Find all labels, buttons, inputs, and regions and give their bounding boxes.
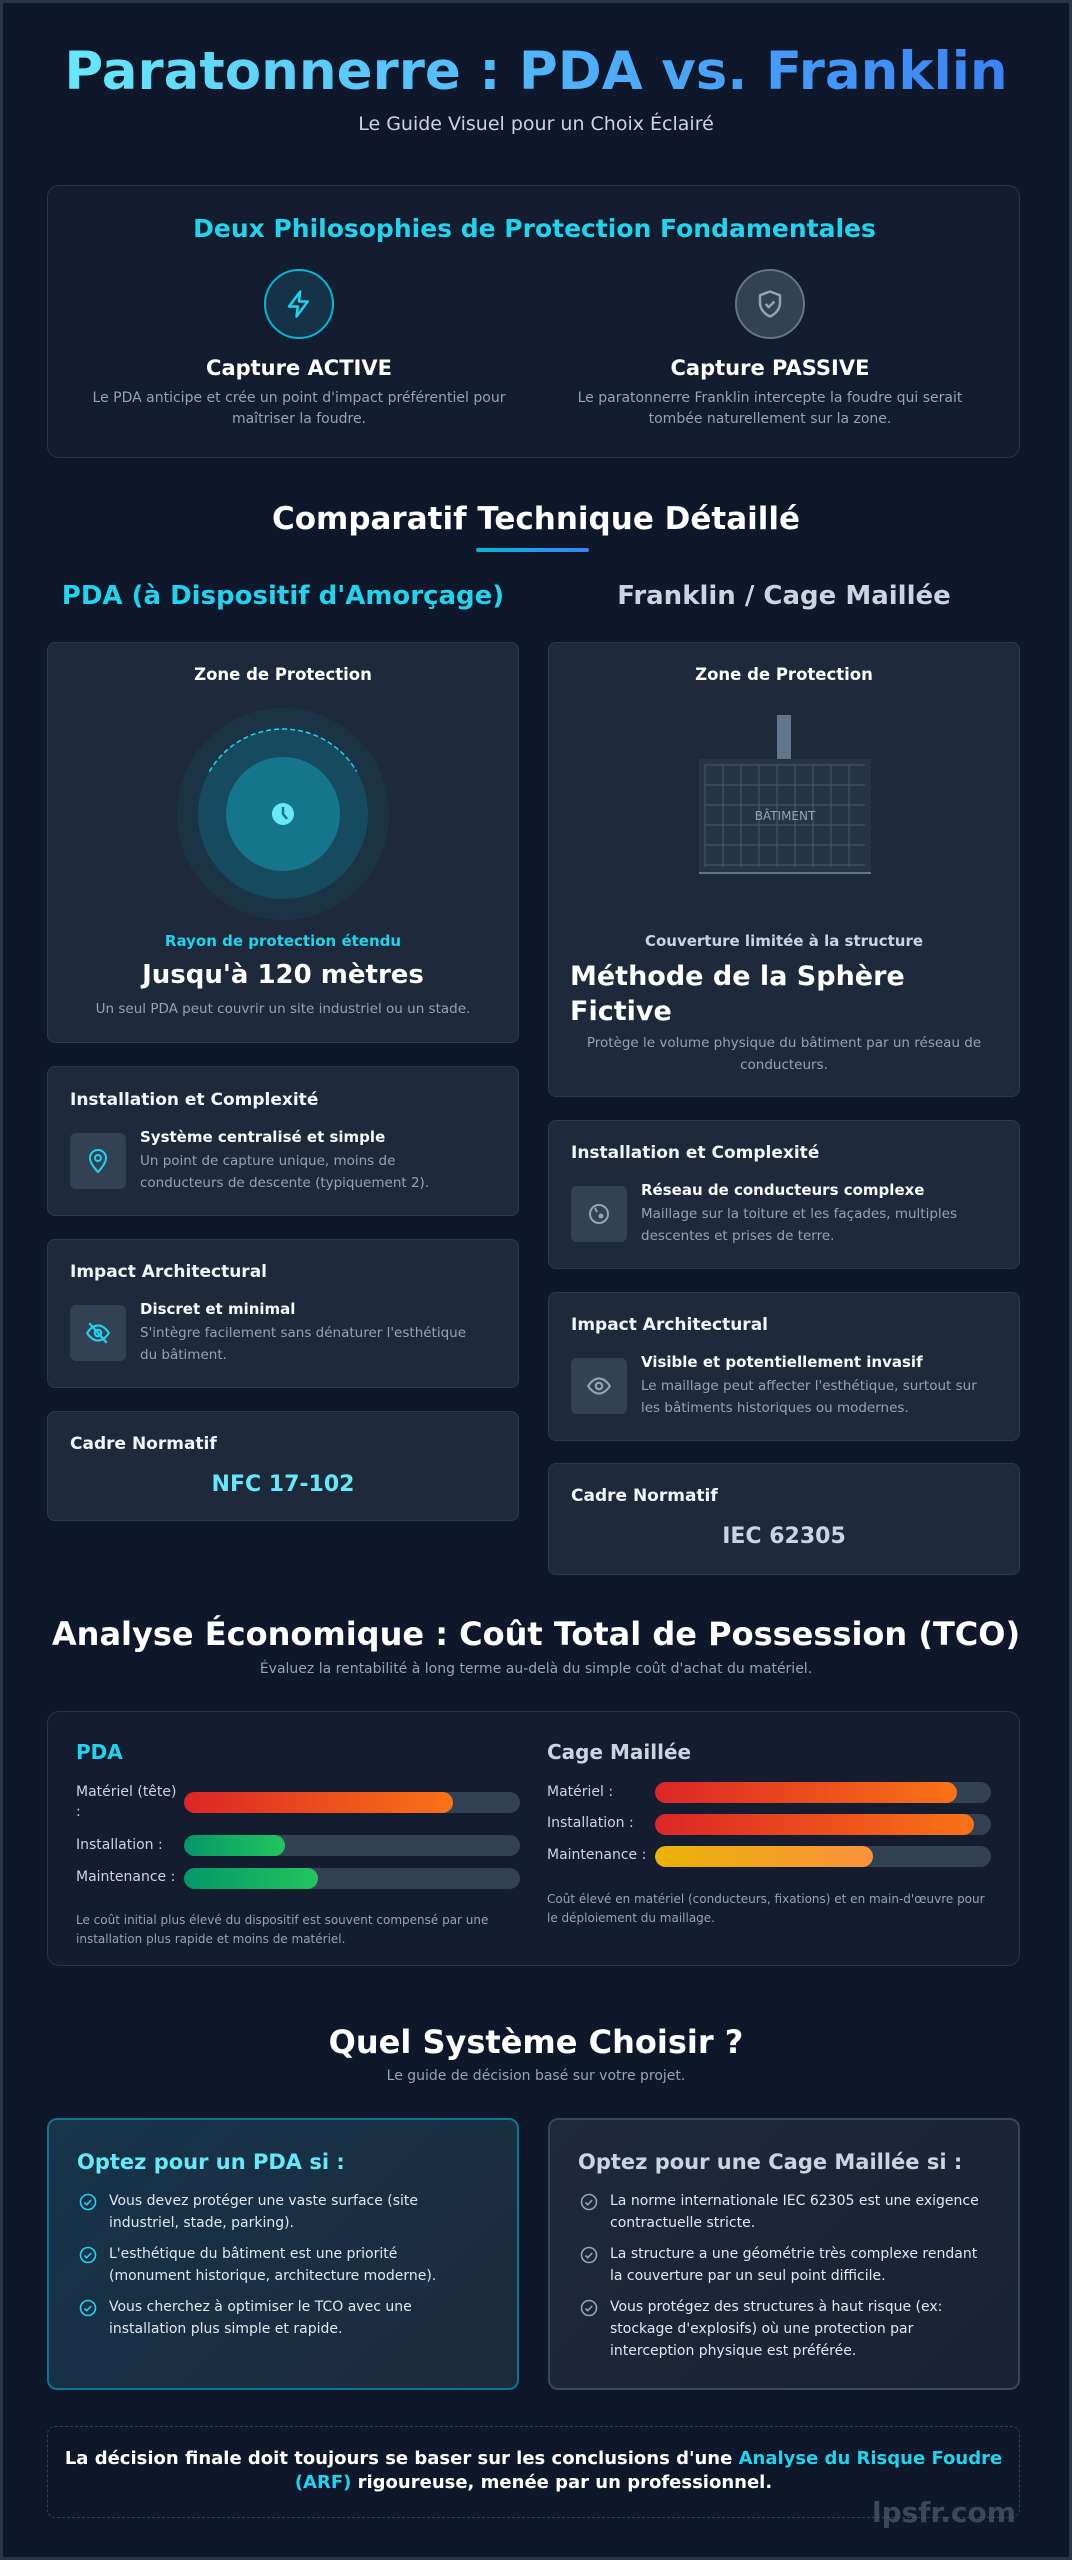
chart: PDA costs: : [76, 1804, 81, 1820]
panel: opt for cage: La structure a une géométrie très complexe rendant [610, 2246, 977, 2262]
panel: PDA zone: Rayon de protection étendu [165, 932, 401, 950]
panel: Franklin impact: Impact Architectural [571, 1315, 768, 1335]
panel: opt for PDA: Optez pour un PDA si : [77, 2150, 345, 2174]
panel: Franklin impact: les bâtiments historiques ou modernes. [641, 1400, 909, 1416]
text: capture active: maîtriser la foudre. [232, 411, 366, 427]
chart: cage costs: Installation : [547, 1815, 634, 1831]
chart: PDA costs [76, 1740, 520, 1946]
list: cage reasons [580, 2193, 979, 2359]
list: PDA reasons [80, 2193, 436, 2337]
panel: Franklin installation: Maillage sur la toiture et les façades, multiples [641, 1206, 957, 1222]
panel: opt for cage: Optez pour une Cage Maillée si : [578, 2150, 962, 2174]
chart: PDA costs: PDA [76, 1740, 123, 1764]
panel: Franklin zone: Protège le volume physique du bâtiment par un réseau de conducteurs. [587, 1035, 981, 1073]
icon: network [571, 1186, 627, 1242]
panel: opt for cage: la couverture par un seul point difficile. [610, 2268, 886, 2284]
panel: PDA zone: Jusqu'à 120 mètres [142, 960, 424, 990]
icon: eye off [70, 1305, 126, 1361]
chart: PDA costs: Le coût initial plus élevé du dispositif est souvent compensé par une installation plus rapide et moins de matériel. [76, 1913, 488, 1946]
heading: philosophies: Deux Philosophies de Protection Fondamentales [193, 214, 876, 243]
panel: Franklin zone: Couverture limitée à la structure [645, 932, 923, 950]
panel: PDA impact: du bâtiment. [140, 1347, 227, 1363]
panel: opt for PDA: (monument historique, architecture moderne). [109, 2268, 436, 2284]
watermark: lpsfr.com [872, 2496, 1016, 2529]
icon: meshed building: BÂTIMENT [755, 808, 816, 823]
panel: PDA installation [47, 1066, 519, 1216]
panel: opt for cage: interception physique est préférée. [610, 2343, 856, 2359]
panel: PDA normatif [47, 1411, 519, 1521]
chart: protection radius circles [177, 708, 389, 920]
subtitle: TCO: Évaluez la rentabilité à long terme au-delà du simple coût d'achat du matériel. [260, 1661, 812, 1677]
panel: opt for PDA: Vous devez protéger une vaste surface (site industriel, stade, parking). [109, 2193, 418, 2231]
callout: final decision: La décision finale doit toujours se baser sur les conclusions d'une Analyse du Risque Foudre [65, 2448, 1002, 2469]
panel: opt for cage: Vous protégez des structures à haut risque (ex: [610, 2299, 942, 2315]
panel: Franklin normatif: IEC 62305 [722, 1524, 846, 1549]
icon: location pin [70, 1133, 126, 1189]
panel: PDA impact [47, 1239, 519, 1388]
panel: PDA installation: Installation et Complexité [70, 1090, 318, 1110]
panel: PDA installation: Un point de capture unique, moins de conducteurs de descente (typiquement 2). [140, 1153, 429, 1191]
text: capture active [93, 356, 506, 427]
heading: quel système: Quel Système Choisir ? [329, 2023, 743, 2061]
panel: PDA zone: Zone de Protection [194, 665, 372, 684]
text: capture passive: Le paratonnerre Franklin intercepte la foudre qui serait [578, 390, 962, 406]
panel: PDA impact: Discret et minimal [140, 1300, 295, 1318]
panel: Franklin impact [548, 1292, 1020, 1441]
panel: PDA normatif: Cadre Normatif [70, 1434, 217, 1454]
panel: two philosophies [47, 185, 1020, 458]
chart: cage costs: Maintenance : [547, 1847, 646, 1863]
panel: Franklin installation: Installation et Complexité [571, 1143, 819, 1163]
subtitle: Le Guide Visuel pour un Choix Éclairé [358, 113, 714, 135]
chart: cage costs: Coût élevé en matériel (conducteurs, fixations) et en main-d'œuvre pour le déploiement du maillage. [547, 1892, 985, 1925]
panel: opt for cage: La norme internationale IEC 62305 est une exigence contractuelle stricte. [610, 2193, 979, 2231]
panel: Franklin zone [548, 642, 1020, 1097]
icon: eye [571, 1358, 627, 1414]
title: Paratonnerre : PDA vs. Franklin [64, 41, 1008, 102]
text: capture passive: Capture PASSIVE [671, 356, 869, 380]
panel: Franklin zone: Méthode de la Sphère Fictive [570, 961, 905, 1027]
panel: Franklin impact: Le maillage peut affecter l'esthétique, surtout sur [641, 1378, 977, 1394]
panel: opt for cage: stockage d'explosifs) où une protection par [610, 2321, 913, 2337]
heading: TCO: Analyse Économique : Coût Total de Possession (TCO) [52, 1615, 1020, 1653]
panel: opt for cage [548, 2118, 1020, 2390]
heading: PDA column: PDA (à Dispositif d'Amorçage) [62, 581, 504, 611]
icon: shield [735, 269, 805, 339]
panel: Franklin impact: Visible et potentiellement invasif [641, 1353, 923, 1371]
callout: final decision [47, 2426, 1020, 2518]
heading: comparatif: Comparatif Technique Détaillé [272, 501, 800, 537]
chart: PDA costs: Installation : [76, 1837, 163, 1853]
text: capture passive [578, 356, 962, 427]
panel: opt for PDA: Vous cherchez à optimiser le TCO avec une installation plus simple et rapide. [109, 2299, 412, 2337]
chart: cage costs [547, 1740, 991, 1925]
panel: PDA normatif: NFC 17-102 [212, 1472, 354, 1497]
icon: lightning [264, 269, 334, 339]
chart: cage costs: Matériel : [547, 1784, 613, 1800]
panel: Franklin normatif [548, 1463, 1020, 1575]
panel: Franklin installation [548, 1120, 1020, 1269]
panel: Franklin installation: descentes et prises de terre. [641, 1228, 834, 1244]
panel: PDA zone: Un seul PDA peut couvrir un site industriel ou un stade. [96, 1001, 470, 1017]
chart: cage costs: Cage Maillée [547, 1740, 691, 1764]
panel: PDA impact: Impact Architectural [70, 1262, 267, 1282]
panel: Franklin zone: Zone de Protection [695, 665, 873, 684]
panel: Franklin normatif: Cadre Normatif [571, 1486, 718, 1506]
heading: Franklin column: Franklin / Cage Maillée [617, 581, 951, 611]
panel: PDA installation: Système centralisé et simple [140, 1128, 385, 1146]
panel: PDA zone [47, 642, 519, 1043]
chart: PDA costs: Maintenance : [76, 1869, 175, 1885]
panel: TCO bar chart [47, 1711, 1020, 1966]
text: capture active: Le PDA anticipe et crée un point d'impact préférentiel pour [93, 390, 505, 406]
callout: final decision: (ARF) rigoureuse, menée par un professionnel. [295, 2472, 772, 2493]
text: capture active: Capture ACTIVE [206, 356, 392, 380]
panel: opt for PDA: L'esthétique du bâtiment est une priorité [109, 2246, 397, 2262]
icon: meshed building [699, 715, 871, 874]
panel: PDA impact: S'intègre facilement sans dénaturer l'esthétique [140, 1325, 466, 1341]
text: capture passive: tombée naturellement sur la zone. [649, 411, 891, 427]
chart: PDA costs: Matériel (tête) [76, 1784, 176, 1800]
panel: opt for PDA [47, 2118, 519, 2390]
subtitle: guide: Le guide de décision basé sur votre projet. [387, 2068, 685, 2084]
panel: Franklin installation: Réseau de conducteurs complexe [641, 1181, 924, 1199]
